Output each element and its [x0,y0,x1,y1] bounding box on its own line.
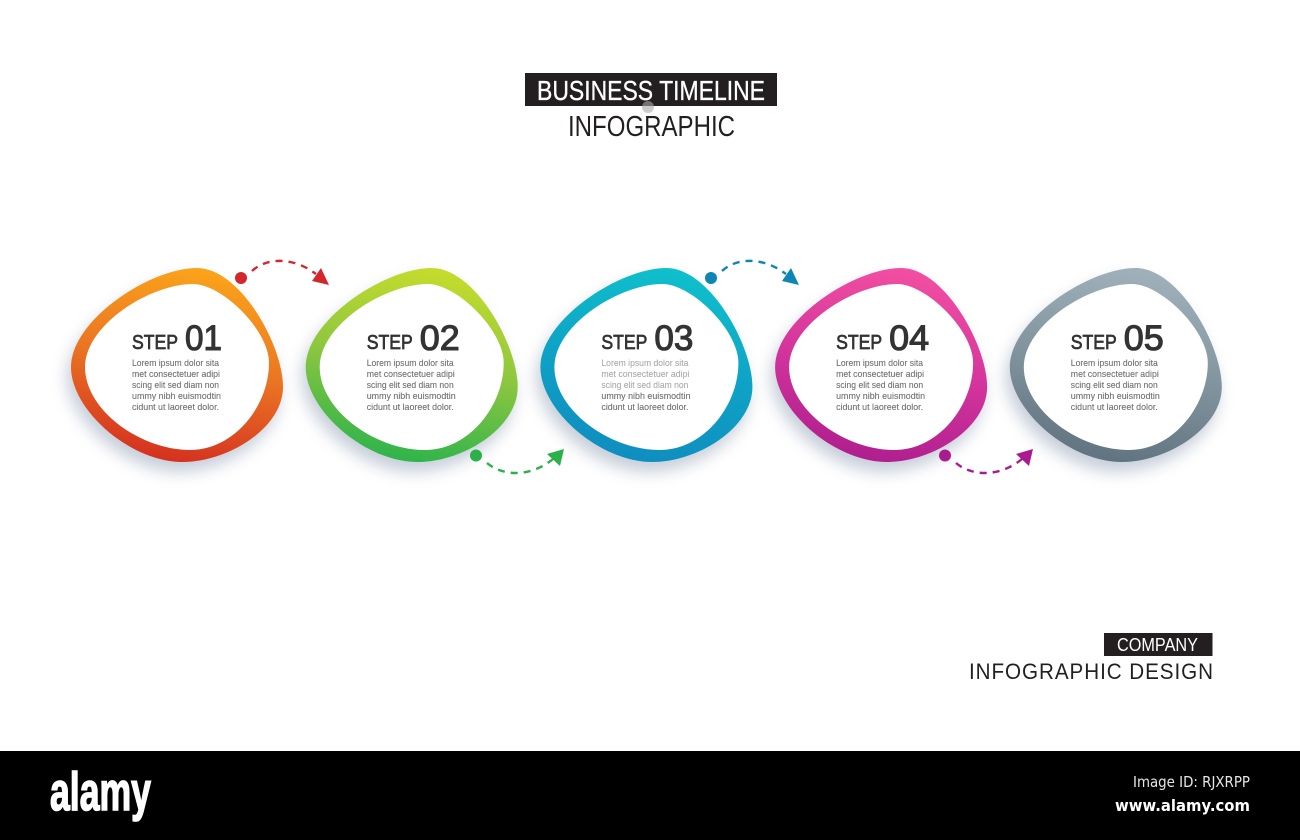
panel: step 05: 05 [1124,319,1164,358]
panel: step 01: 01 [185,319,222,358]
panel: step 05: Lorem ipsum dolor sita [1071,358,1158,369]
company block: INFOGRAPHIC DESIGN [969,659,1214,684]
panel: step 02: scing elit sed diam non [367,380,454,391]
footer bar [0,751,1300,840]
footer website: www.alamy.com [1115,796,1250,815]
footer image id: Image ID: RJXRPP [1133,773,1250,791]
panel: step 02: ummy nibh euismodtin [367,391,456,402]
panel: step 04 [771,268,987,472]
panel: step 01: STEP [132,332,178,354]
panel: step 04: cidunt ut laoreet dolor. [836,402,923,413]
title: INFOGRAPHIC [568,111,735,143]
panel: step 01: Lorem ipsum dolor sita [132,358,220,369]
panel: step 02: STEP [367,332,413,354]
panel: step 03: Lorem ipsum dolor sita [601,358,689,369]
panel: step 05: cidunt ut laoreet dolor. [1071,402,1158,413]
footer logo: alamy [50,762,151,822]
panel: step 04: STEP [836,332,882,354]
panel: step 02: cidunt ut laoreet dolor. [367,402,454,413]
panel: step 02: met consectetuer adipi [367,369,455,380]
panel: step 01 [67,268,283,472]
panel: step 03 [536,268,752,472]
panel: step 04: scing elit sed diam non [836,380,923,391]
panel: step 04: Lorem ipsum dolor sita [836,358,924,369]
company block: COMPANY [1117,635,1198,655]
panel: step 04: met consectetuer adipi [836,369,924,380]
panel: step 03: 03 [654,319,693,358]
panel: step 02 [302,268,518,472]
panel: step 03: STEP [601,332,647,354]
panel: step 05: scing elit sed diam non [1071,380,1158,391]
panel: step 05: STEP [1071,332,1117,354]
arrow: step 04 to step 05 [939,449,1033,473]
arrow: step 03 to step 04 [705,261,799,285]
panel: step 05: ummy nibh euismodtin [1071,391,1160,402]
panel: step 04: ummy nibh euismodtin [836,391,925,402]
panel: step 03: ummy nibh euismodtin [601,391,690,402]
title [525,73,777,143]
panel: step 02: Lorem ipsum dolor sita [367,358,454,369]
panel: step 03: scing elit sed diam non [601,380,688,391]
panel: step 01: ummy nibh euismodtin [132,391,221,402]
panel: step 01: scing elit sed diam non [132,380,219,391]
panel: step 04: 04 [889,319,929,358]
panel: step 05 [1006,268,1222,472]
panel: step 05: met consectetuer adipi [1071,369,1159,380]
title: BUSINESS TIMELINE [537,75,765,106]
panel: step 01: met consectetuer adipi [132,369,220,380]
arrow: step 02 to step 03 [470,449,564,473]
panel: step 03: cidunt ut laoreet dolor. [601,402,688,413]
company block [969,633,1214,684]
panel: step 03: met consectetuer adipi [601,369,689,380]
panel: step 01: cidunt ut laoreet dolor. [132,402,219,413]
panel: step 02: 02 [420,319,460,358]
arrow: step 01 to step 02 [235,261,329,285]
